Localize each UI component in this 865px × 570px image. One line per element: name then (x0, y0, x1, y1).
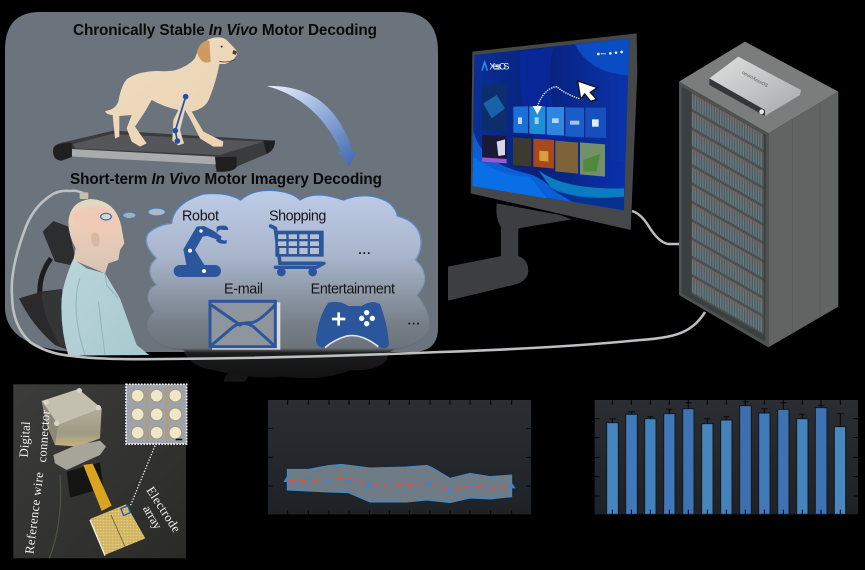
icon: robot arm (174, 226, 228, 277)
photo labels: Electrode (143, 484, 184, 535)
shirt (61, 259, 149, 356)
server rack with decoder box (679, 42, 838, 347)
mean line (287, 478, 512, 491)
label: E-mail: E-mail (224, 281, 263, 297)
chart: bar chart of decoding performance (595, 400, 858, 514)
wheelchair (19, 221, 75, 351)
arrow: curved gradient arrow (267, 86, 357, 167)
photo labels (17, 409, 184, 555)
small thought bubbles (123, 208, 165, 219)
server rack with decoder box: neuroXessOS (741, 70, 769, 88)
photo labels: connector (35, 409, 53, 463)
ellipsis 1: ... (358, 243, 370, 257)
implant marker (101, 213, 111, 220)
cursor arrow (578, 81, 597, 101)
monitor arm (448, 203, 572, 301)
side tile (482, 84, 507, 132)
flexible ribbon (83, 464, 112, 511)
label: Entertainment: Entertainment (311, 281, 395, 297)
decoding box (709, 57, 801, 116)
illustration: seated patient in wheelchair (19, 192, 165, 356)
game tiles (513, 137, 531, 167)
illustration: treadmill (53, 131, 275, 172)
cable: monitor to server rack (632, 211, 680, 244)
application tiles (513, 106, 528, 133)
head (68, 199, 124, 273)
icon: envelope (210, 301, 280, 350)
heading: short-term decoding: Short-term In Vivo Motor Imagery Decoding (70, 171, 382, 188)
electrode array (90, 504, 145, 555)
OS logo: XessOS (489, 62, 509, 72)
cursor trajectory (537, 87, 582, 108)
digital connector (42, 388, 102, 447)
status icons (597, 51, 623, 55)
photo: implant device (13, 384, 187, 558)
monitor with XessOS screen (448, 33, 637, 301)
photo labels: Digital (17, 421, 33, 458)
photo labels: Reference wire (22, 471, 46, 555)
label: Shopping: Shopping (269, 209, 326, 225)
panel: in vivo decoding background (5, 12, 438, 352)
mean markers (283, 475, 516, 493)
chart: stability band with mean line (268, 400, 531, 514)
inset: electrode close-up (126, 384, 187, 444)
illustration: dog with leg markers (105, 37, 237, 147)
icon: shopping cart (271, 226, 324, 276)
label: Robot: Robot (182, 209, 219, 225)
bars (607, 406, 846, 514)
axis ticks (595, 400, 858, 514)
thought cloud with applications (146, 190, 429, 382)
axis ticks (268, 400, 531, 514)
server blades (692, 92, 763, 335)
variance band (287, 464, 512, 503)
ellipsis 2: ... (408, 314, 420, 328)
cable: brain interface to server rack (12, 191, 705, 359)
heading: chronically stable decoding: Chronically Stable In Vivo Motor Decoding (73, 22, 377, 39)
photo labels: array (140, 503, 165, 532)
monitor frame (471, 33, 637, 230)
screen (472, 38, 629, 210)
icon: game controller (316, 302, 389, 348)
error bars (609, 402, 844, 427)
